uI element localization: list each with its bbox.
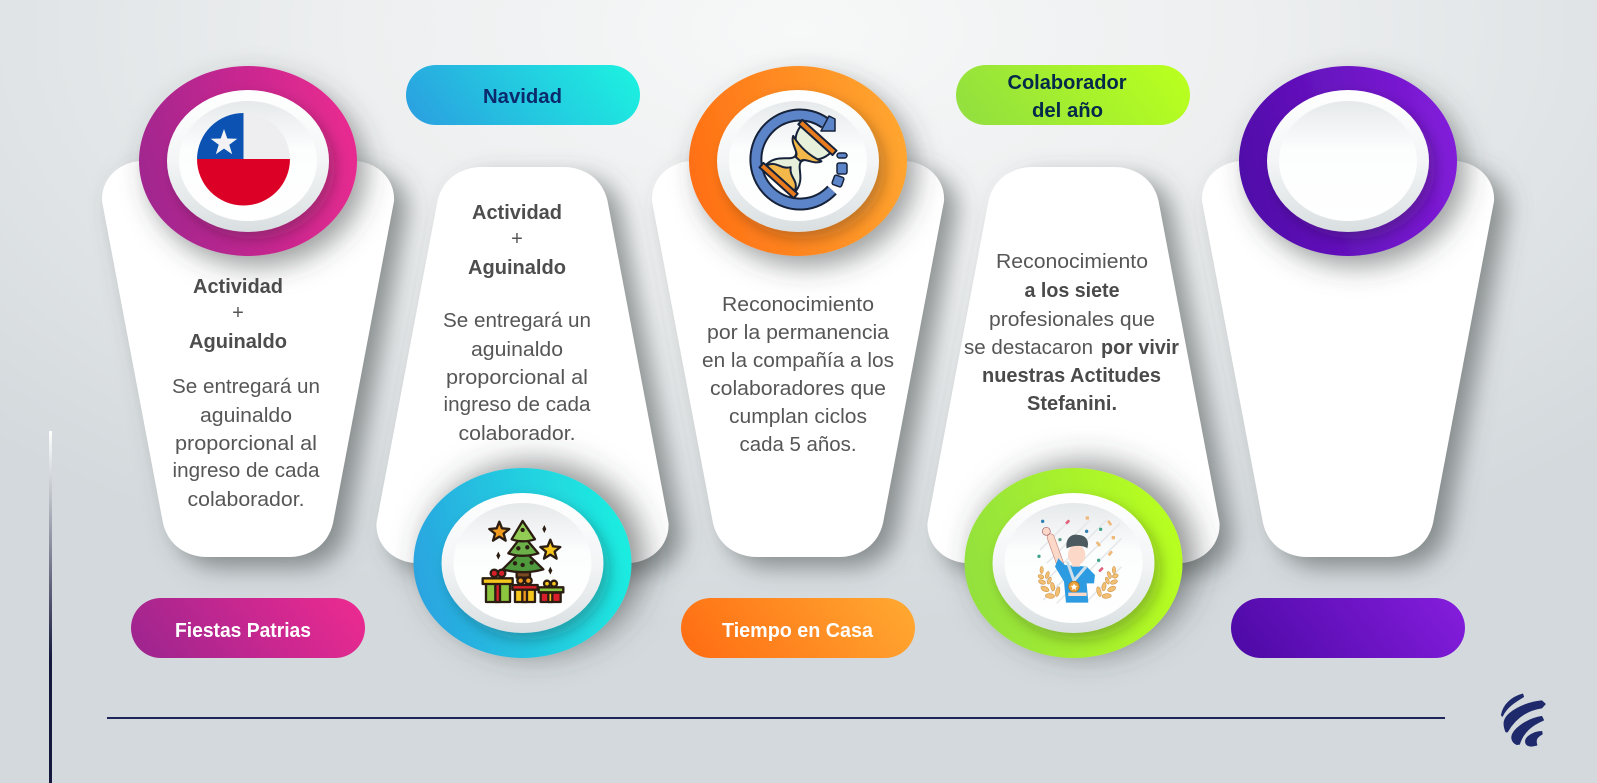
text block: aguinaldo description: Se entregará un	[172, 376, 320, 398]
text block: permanencia description: cada 5 años.	[740, 434, 856, 456]
text block: aguinaldo description: colaborador.	[188, 489, 304, 511]
panel: Tiempo en Casa card	[652, 161, 944, 557]
panel: Colaborador del año card	[927, 167, 1220, 563]
text block: permanencia description: Reconocimiento	[722, 294, 874, 316]
pill: Colaborador del año: Colaborador	[1008, 72, 1127, 94]
column: Fiestas Patrias	[102, 66, 394, 658]
pill: Navidad: Navidad	[483, 86, 562, 108]
pill: Navidad	[406, 65, 640, 125]
text block: siete profesionales description: nuestras Actitudes	[982, 365, 1161, 387]
panel: Fiestas Patrias card	[102, 161, 394, 557]
panel: Navidad card	[376, 167, 669, 563]
heading: Actividad + Aguinaldo	[189, 276, 287, 353]
text block: siete profesionales description	[964, 251, 1179, 415]
pill: empty purple	[1231, 598, 1465, 658]
vertical accent line	[49, 431, 52, 783]
text block: siete profesionales description: Reconocimiento	[996, 251, 1148, 273]
heading: Actividad + Aguinaldo: Aguinaldo	[189, 331, 287, 353]
heading: Actividad + Aguinaldo: Actividad	[472, 202, 562, 224]
text block: aguinaldo description: ingreso de cada	[444, 394, 591, 416]
heading: Actividad + Aguinaldo: +	[511, 228, 523, 250]
pill: Tiempo en Casa	[681, 598, 915, 658]
text block: aguinaldo description: Se entregará un	[443, 310, 591, 332]
horizontal footer line	[107, 717, 1445, 719]
text block: siete profesionales description: a los siete	[1024, 280, 1120, 302]
text block: aguinaldo description: colaborador.	[458, 423, 576, 445]
icon badge: hourglass with circular arrow	[689, 66, 907, 256]
column: Colaborador del año	[927, 65, 1220, 658]
text block: aguinaldo description: aguinaldo	[471, 339, 563, 361]
text block: siete profesionales description: Stefanini.	[1027, 393, 1117, 415]
icon badge: empty purple	[1239, 66, 1457, 256]
text block: siete profesionales description: profesionales que	[989, 309, 1155, 331]
text block: aguinaldo description: aguinaldo	[200, 405, 292, 427]
text block: permanencia description: en la compañía a los	[702, 350, 894, 372]
heading: Actividad + Aguinaldo: Aguinaldo	[468, 257, 566, 279]
text block: siete profesionales description: por vivir	[1101, 337, 1179, 359]
pill: Fiestas Patrias: Fiestas Patrias	[175, 620, 311, 642]
text block: permanencia description	[702, 294, 894, 456]
column: Tiempo en Casa	[652, 66, 944, 658]
heading: Actividad + Aguinaldo: Actividad	[193, 276, 283, 298]
text block: permanencia description: colaboradores que	[710, 378, 886, 400]
pill: Colaborador del año: del año	[1032, 100, 1103, 122]
heading: Actividad + Aguinaldo	[468, 202, 566, 279]
pill: Tiempo en Casa: Tiempo en Casa	[722, 620, 874, 642]
icon badge: Christmas tree and gifts	[414, 468, 632, 658]
icon badge: winner with medal	[964, 468, 1182, 658]
text block: aguinaldo description: proporcional al	[175, 433, 317, 455]
text block: permanencia description: por la permanencia	[707, 322, 890, 344]
text block: aguinaldo description	[172, 376, 320, 511]
text block: siete profesionales description: se destacaron	[964, 337, 1093, 359]
column: empty purple	[1202, 66, 1494, 658]
text block: aguinaldo description	[443, 310, 591, 445]
text block: aguinaldo description: ingreso de cada	[172, 460, 320, 482]
text block: permanencia description: cumplan ciclos	[729, 406, 867, 428]
pill: Fiestas Patrias	[131, 598, 365, 658]
pill: Colaborador del año	[956, 65, 1190, 125]
column: Navidad	[376, 65, 669, 658]
logo: striped globe	[1502, 694, 1545, 746]
heading: Actividad + Aguinaldo: +	[232, 302, 244, 324]
text block: aguinaldo description: proporcional al	[446, 367, 588, 389]
panel: empty card	[1202, 161, 1494, 557]
icon badge: Chile flag	[139, 66, 357, 256]
